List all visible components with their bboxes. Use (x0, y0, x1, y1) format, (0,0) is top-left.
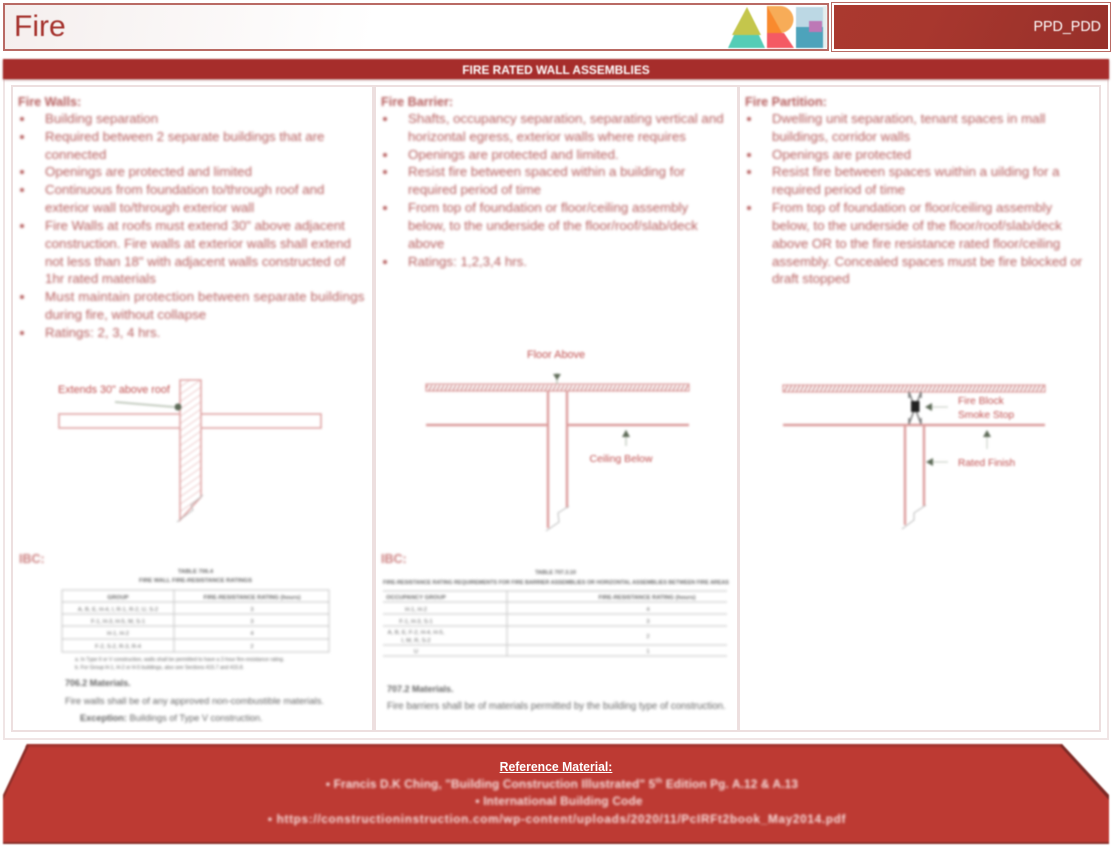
text block: fire walls list: not less than 18" with adjacent walls constructed of (45, 254, 345, 269)
text block: fire barrier list: horizontal egress, exterior walls where requires (408, 129, 686, 144)
text block: fire walls list: during fire, without collapse (45, 307, 206, 322)
diagram: fire wall extending above roof: Extends 30" above roof (58, 384, 171, 396)
ratings grid: A, B, E, H-4, I, R-1, R-2, U, S-2 (78, 607, 158, 613)
text block: fire walls list: Fire Walls at roofs must extend 30" above adjacent (45, 218, 345, 233)
label: IBC: IBC: (381, 552, 407, 566)
diagram: fire barrier floor to ceiling: Ceiling Below (590, 454, 653, 465)
table notes: b. For Group H-1, H-2 or H-5 buildings, also see Sections 415.7 and 415.8. (75, 665, 244, 671)
ratings grid: FIRE-RESISTANCE RATING (hours) (203, 595, 301, 601)
table: fire wall fire-resistance ratings (60, 568, 331, 724)
icon: ARE logo (728, 5, 828, 49)
text block: fire partition list: draft stopped (772, 271, 850, 286)
ratings grid: A, B, E, F-2, H-4, H-5, (388, 630, 445, 636)
text block: fire barrier list: Fire Barrier: (381, 95, 453, 109)
ratings grid: 4 (250, 631, 254, 637)
table title: FIRE-RESISTANCE RATING REQUIREMENTS FOR FIRE BARRIER ASSEMBLIES OR HORIZONTAL ASSEMBLIES BETWEEN FIRE AREAS (383, 580, 729, 586)
text block: fire partition list: above OR to the fire resistance rated floor/ceiling (772, 236, 1060, 251)
ratings grid: 4 (646, 607, 650, 613)
text block: fire walls list: Openings are protected and limited (45, 164, 252, 179)
heading: fire rated wall assemblies: FIRE RATED WALL ASSEMBLIES (462, 63, 650, 77)
text block: fire walls list: Must maintain protection between separate buildings (45, 289, 365, 304)
ratings grid: 3 (250, 619, 254, 625)
panel: fire barrier (374, 85, 739, 732)
diagram: fire partition with fire block (781, 383, 1047, 530)
text block: fire partition list: From top of foundation or floor/ceiling assembly (772, 200, 1052, 215)
text block: fire partition list: Dwelling unit separation, tenant spaces in mall (772, 111, 1045, 126)
text block: fire barrier list: Resist fire between spaced within a building for (408, 164, 685, 179)
text block: fire partition list: required period of time (772, 182, 905, 197)
table title: FIRE WALL FIRE-RESISTANCE RATINGS (139, 578, 252, 584)
ratings grid: F-1, H-3, S-1 (399, 619, 433, 625)
text block: fire partition list: below, to the underside of the floor/roof/slab/deck (772, 218, 1062, 233)
ratings grid: OCCUPANCY GROUP (386, 595, 446, 601)
exception text: Exception: Buildings of Type V construction. (80, 713, 263, 723)
section frame (3, 79, 1109, 740)
diagram: fire wall extending above roof (57, 378, 323, 523)
panel: reference material (2, 743, 1110, 845)
text block: fire barrier list (380, 95, 725, 270)
ratings grid: GROUP (107, 595, 129, 601)
ratings grid (383, 590, 727, 658)
ratings grid: U (414, 649, 418, 655)
text block: fire barrier list: below, to the underside of the floor/roof/slab/deck (408, 218, 698, 233)
text block: fire walls list: Continuous from foundation to/through roof and (45, 182, 324, 197)
diagram: fire partition with fire block: Fire Block (958, 396, 1005, 407)
text block: fire walls list: Required between 2 separate buildings that are (45, 129, 324, 144)
table: fire barrier ratings (382, 568, 730, 712)
ratings grid: 2 (646, 634, 650, 640)
text block: reference list (266, 759, 847, 827)
text block: fire barrier list: Ratings: 1,2,3,4 hrs. (408, 254, 527, 269)
ratings grid: 3 (250, 607, 254, 613)
diagram: fire partition with fire block: Smoke Stop (958, 410, 1014, 421)
ratings grid: 1 (646, 649, 650, 655)
title bar (3, 3, 829, 51)
diagram: fire barrier floor to ceiling: Floor Above (527, 349, 585, 361)
text block: fire walls list: Building separation (45, 111, 158, 126)
text block: fire walls list (17, 95, 366, 342)
ratings grid: F-1, H-3, H-5, M, S-1 (91, 619, 145, 625)
reference items: • Francis D.K Ching, "Building Construction Illustrated" 5th Edition Pg. A.12 & A.13 (326, 777, 798, 791)
heading: Fire: Fire (14, 10, 66, 43)
text block: fire partition list: Resist fire between spaces wuithin a uilding for a (772, 164, 1060, 179)
panel: fire walls (11, 85, 374, 732)
reference items (266, 776, 847, 827)
ratings grid (60, 588, 331, 654)
table title: TABLE 706.4 (178, 569, 213, 575)
text block: fire partition list: Openings are protected (772, 147, 911, 162)
materials text: Fire walls shall be of any approved non-combustible materials. (65, 695, 324, 706)
table title (382, 568, 730, 586)
text block: fire walls list: Ratings: 2, 3, 4 hrs. (45, 325, 160, 340)
reference items: • International Building Code (475, 794, 643, 808)
text block: fire walls list: exterior wall to/through exterior wall (45, 200, 254, 215)
text block: fire walls list: connected (45, 147, 106, 162)
text block: fire walls list: 1hr rated materials (45, 271, 156, 286)
materials heading: 707.2 Materials. (387, 684, 454, 694)
table title (138, 568, 254, 584)
text block: fire partition list: buildings, corridor walls (772, 129, 910, 144)
reference heading: Reference Material: (500, 759, 612, 774)
materials text: Fire barriers shall be of materials permitted by the building type of construction. (387, 701, 726, 712)
label: IBC: IBC: (19, 552, 45, 566)
text block: fire barrier list: From top of foundation or floor/ceiling assembly (408, 200, 688, 215)
code label box (832, 3, 1110, 51)
text block: fire barrier list: required period of time (408, 182, 541, 197)
text block: fire partition list: assembly. Concealed spaces must be fire blocked or (772, 254, 1082, 269)
panel: fire partition (738, 85, 1101, 732)
ratings grid: 3 (646, 619, 650, 625)
ratings grid: 2 (250, 644, 254, 650)
ratings grid: FIRE-RESISTANCE RATING (hours) (598, 595, 696, 601)
ratings grid: I, M, R, S-2 (401, 638, 431, 644)
table notes (74, 656, 284, 671)
text block: fire partition list (744, 95, 1083, 287)
text block: fire barrier list: Shafts, occupancy separation, separating vertical and (408, 111, 724, 126)
label: PPD_PDD: PPD_PDD (1033, 19, 1101, 35)
table notes: a. In Type II or V construction, walls shall be permitted to have a 2-hour fire-resistance rating. (75, 657, 284, 663)
text block: fire barrier list: above (408, 236, 444, 251)
ratings grid: H-1, H-2 (405, 607, 427, 613)
text block: fire walls list: construction. Fire walls at exterior walls shall extend (45, 236, 351, 251)
text block: fire partition list: Fire Partition: (745, 95, 827, 109)
reference items: • https://constructioninstruction.com/wp-content/uploads/2020/11/PcIRFt2book_May2014.pdf (268, 812, 846, 826)
table title: TABLE 707.3.10 (535, 570, 576, 576)
diagram: fire partition with fire block: Rated Finish (958, 458, 1015, 469)
materials heading: 706.2 Materials. (65, 678, 131, 688)
text block: fire barrier list: Openings are protected and limited. (408, 147, 619, 162)
section heading band (3, 59, 1109, 79)
text block: fire walls list: Fire Walls: (18, 95, 81, 109)
ratings grid: F-2, S-2, R-3, R-4 (95, 644, 142, 650)
ratings grid: H-1, H-2 (107, 631, 129, 637)
diagram: fire barrier floor to ceiling (424, 349, 691, 532)
